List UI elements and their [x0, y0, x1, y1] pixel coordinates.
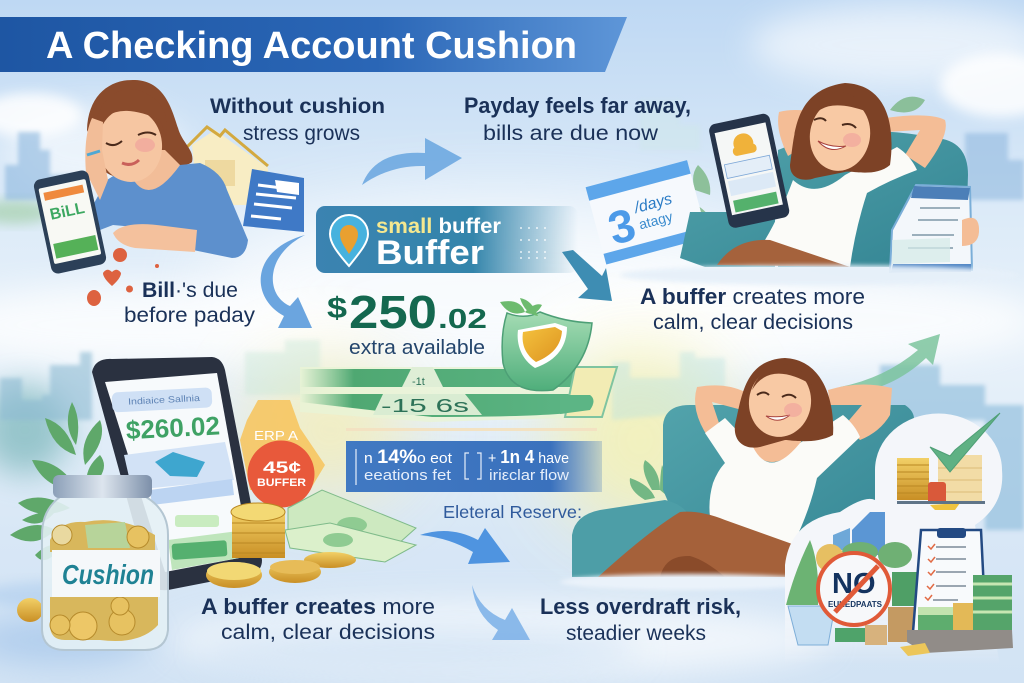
panel: stats	[346, 441, 602, 492]
icon: tablet checklist	[890, 185, 979, 272]
icon: green shield	[500, 298, 592, 391]
pants	[717, 240, 850, 267]
icon: cushion jar: Cushion	[62, 559, 154, 590]
text: payday feels far away	[464, 93, 691, 145]
panel: stats: iriεclar flow	[489, 468, 570, 484]
face	[744, 363, 816, 441]
text: a buffer creates more (right)	[640, 284, 865, 334]
text: a buffer creates more (left): A buffer creates more	[201, 594, 435, 619]
chair	[680, 131, 968, 267]
text: payday feels far away: bills are due now	[483, 121, 658, 145]
right arm	[828, 384, 892, 440]
panel: small buffer header: small buffer	[376, 215, 501, 238]
text: without cushion: stress grows	[243, 122, 360, 145]
text: less overdraft risk	[540, 594, 741, 645]
icon: red hearts	[87, 248, 159, 306]
panel: no overdrafts and savings cluster	[785, 413, 1013, 665]
text: a buffer creates more (right): A buffer creates more	[640, 284, 865, 309]
panel: stats: eeations fet	[364, 468, 451, 484]
amount: $250.02 extra available: $	[327, 292, 347, 325]
text: a buffer creates more (right): calm, clear decisions	[653, 310, 853, 334]
text: bill's due	[124, 278, 255, 327]
icon: plant basket	[786, 540, 835, 645]
icon: calendar: 3	[603, 198, 641, 255]
icon: location pin	[330, 215, 368, 266]
icon: large phone: Indiaice Sallnia	[128, 393, 200, 407]
panel: relaxed woman on armchair	[572, 358, 914, 577]
icon: phone with bill: BiLL	[48, 200, 86, 224]
icon: cushion jar	[42, 475, 168, 650]
text: less overdraft risk: Less overdraft risk,	[540, 594, 741, 619]
icon: large phone	[92, 357, 262, 590]
arrow: top curved	[362, 138, 462, 185]
icon: green stacks and buildings	[816, 512, 917, 645]
icon: no overdrafts sign: EUHEDPAATS	[828, 600, 883, 609]
text: without cushion	[210, 94, 385, 145]
panel: stats: + 1n 4 have	[488, 447, 569, 467]
icon: phone with bill	[33, 169, 107, 275]
face	[804, 94, 876, 176]
icon: no overdrafts sign	[818, 553, 890, 625]
chair	[663, 405, 914, 575]
plant	[630, 460, 667, 500]
hair	[735, 358, 833, 448]
hair	[790, 83, 892, 180]
panel: small buffer header	[316, 206, 578, 273]
amount: $250.02 extra available	[327, 286, 487, 359]
green money bands: -15 6s	[381, 396, 469, 416]
cloud band under top right scene	[620, 265, 1020, 285]
white cloud	[785, 414, 1002, 665]
arrow: left curved	[261, 235, 312, 328]
shirt	[765, 147, 917, 267]
icon: buffer badge: 45¢	[263, 458, 302, 477]
icon: coin stacks	[17, 503, 356, 622]
left arm	[778, 110, 815, 156]
panel: stats: n 14%o eot	[364, 447, 453, 468]
icon: blue document	[243, 169, 304, 232]
green money bands: -1t	[412, 376, 425, 388]
text: payday feels far away: Payday feels far away,	[464, 93, 691, 118]
left arm	[695, 385, 745, 437]
icon: coins, folder and check	[897, 413, 1000, 510]
icon: buffer badge: BUFFER	[257, 477, 306, 489]
text: less overdraft risk: steadier weeks	[566, 621, 706, 645]
plant	[10, 402, 104, 560]
divider bar	[346, 428, 597, 431]
neck	[750, 425, 805, 462]
icon: clipboard	[913, 528, 986, 632]
shirt	[705, 415, 860, 545]
icon: house	[187, 127, 268, 205]
icon: calendar	[586, 160, 708, 265]
icon: large phone: $260.02	[125, 410, 221, 445]
plant	[675, 97, 925, 225]
arrow: bottom curved upper	[420, 528, 510, 564]
icon: calendar: atagy	[637, 208, 674, 232]
panel: stressed woman	[33, 80, 304, 306]
text: a buffer creates more (left)	[201, 594, 435, 644]
pants	[598, 512, 795, 577]
amount: $250.02 extra available: .02	[438, 303, 487, 334]
text: without cushion: Without cushion	[210, 94, 385, 118]
panel: small buffer header: Buffer	[376, 234, 484, 272]
text: bill's due: Bill·'s due	[142, 278, 238, 302]
green money bands	[300, 367, 617, 422]
icon: buffer badge: ERP A	[254, 428, 298, 443]
text: eleteral reserve: Eleteral Reserve:	[443, 502, 582, 522]
woman 1 figure	[85, 80, 248, 258]
icon: cash notes	[285, 490, 416, 562]
icon: phone	[708, 112, 791, 229]
icon: cash stacks and tray	[900, 575, 1013, 656]
panel: jar, phone and coins	[10, 357, 416, 650]
icon: calendar: /days	[632, 191, 674, 217]
title banner: A Checking Account Cushion	[46, 25, 577, 67]
icon: buffer badge	[240, 400, 325, 508]
panel: relaxed woman on phone	[586, 83, 979, 272]
text: a buffer creates more (left): calm, clear decisions	[221, 620, 435, 644]
amount: $250.02 extra available: 250	[349, 286, 437, 338]
title banner	[0, 17, 627, 72]
arrow: right diagonal	[562, 250, 612, 301]
icon: no overdrafts sign: NO	[832, 568, 876, 600]
text: bill's due: before paday	[124, 303, 255, 327]
arrow: green rising	[840, 334, 940, 395]
right arm	[885, 115, 946, 168]
decorative city skyline	[0, 100, 1024, 530]
cloud band under armchair	[560, 574, 820, 590]
arrow: bottom curved lower	[472, 585, 530, 640]
amount: $250.02 extra available: extra available	[349, 336, 485, 359]
